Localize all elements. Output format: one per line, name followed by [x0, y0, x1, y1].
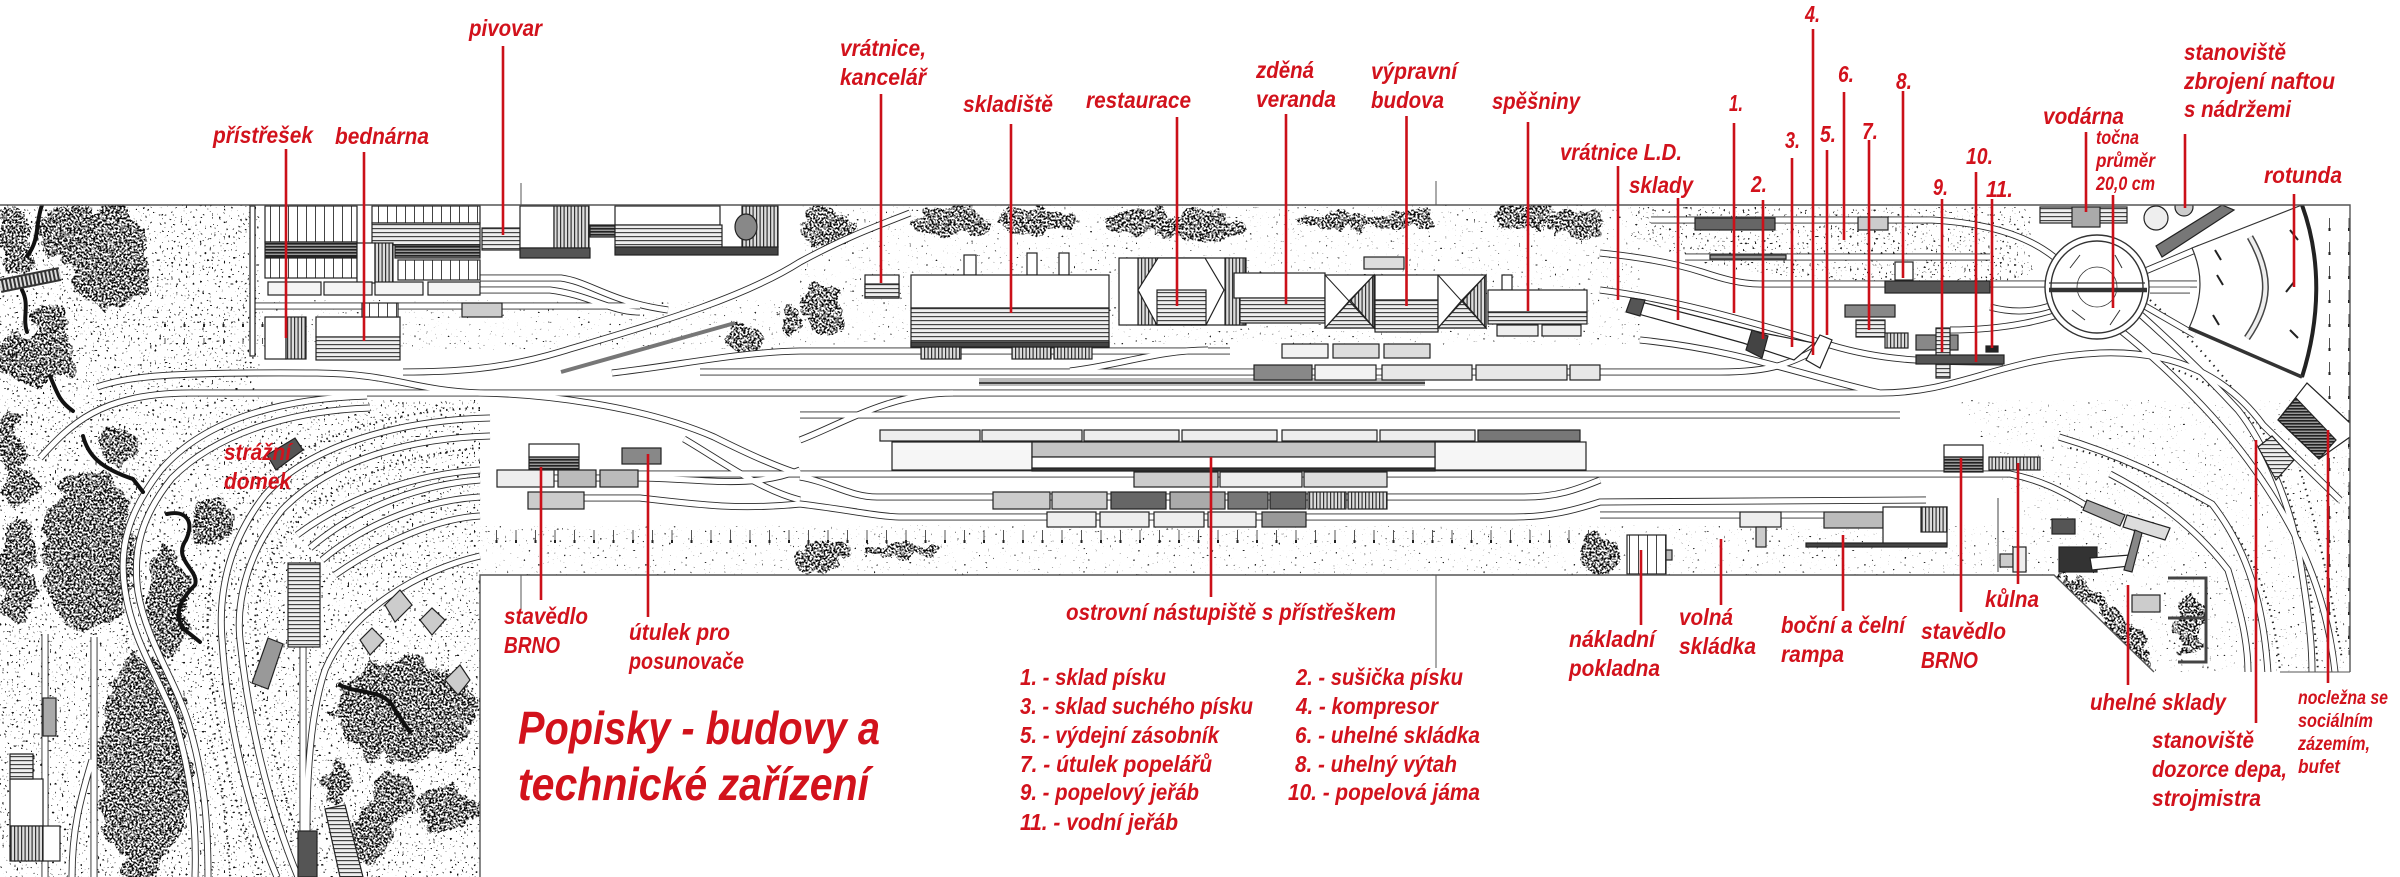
- title: [518, 702, 880, 810]
- label: volná skládka: volná: [1679, 604, 1733, 630]
- buildings: brewery complex: [250, 206, 778, 360]
- southern yard buildings: [1627, 445, 2206, 662]
- label: volná skládka: skládka: [1679, 633, 1756, 659]
- buildings: main station row: [865, 253, 1600, 380]
- label: ostrovní nástupiště s přístřeškem: ostrovní nástupiště s přístřeškem: [1066, 599, 1396, 625]
- label: nákladní pokladna: [1568, 550, 1660, 681]
- label: volná skládka: [1679, 539, 1756, 659]
- label: strážní domek: strážní: [224, 439, 293, 465]
- label: stavědlo BRNO west: BRNO: [504, 632, 560, 658]
- label: 5.: 5.: [1820, 121, 1836, 147]
- label: skladiště: skladiště: [963, 91, 1053, 117]
- label: vrátnice L.D.: vrátnice L.D.: [1560, 139, 1682, 165]
- legend: numbered list right column: 8. - uhelný výtah: [1295, 751, 1457, 777]
- label: nocležna se sociálním zázemím, bufet: sociálním: [2298, 711, 2373, 732]
- ballast dots along curved tracks: [111, 300, 2342, 877]
- label: nocležna se sociálním zázemím, bufet: zázemím,: [2297, 734, 2370, 755]
- label: útulek pro posunovače: [628, 454, 744, 674]
- tree ticks along embankment: [496, 530, 1590, 543]
- label: sklady: sklady: [1629, 172, 1694, 198]
- label: strážní domek: [224, 439, 293, 494]
- label: bednárna: bednárna: [335, 123, 429, 149]
- label: stanoviště dozorce depa, strojmistra: strojmistra: [2152, 785, 2261, 811]
- legend: numbered list left column: 3. - sklad suchého písku: [1020, 693, 1253, 719]
- label: 11.: 11.: [1986, 176, 2013, 202]
- legend: numbered list right column: 4. - kompresor: [1295, 693, 1439, 719]
- label: uhelné sklady: [2090, 585, 2227, 715]
- label: boční a čelní rampa: [1781, 535, 1907, 667]
- label: 4.: 4.: [1804, 1, 1820, 27]
- label: výpravní budova: výpravní: [1371, 58, 1459, 84]
- label: restaurace: restaurace: [1086, 87, 1191, 113]
- legend: numbered list left column: [1020, 664, 1253, 835]
- trees: [0, 199, 2205, 877]
- label: kůlna: kůlna: [1985, 586, 2039, 612]
- label: 2.: 2.: [1750, 171, 1767, 197]
- label: vrátnice, kancelář: kancelář: [840, 64, 929, 90]
- depot: water tower and diesel stand: [2040, 198, 2234, 257]
- label: zděná veranda: veranda: [1256, 86, 1336, 112]
- title: Popisky - budovy a: [518, 702, 880, 754]
- label: boční a čelní rampa: boční a čelní: [1781, 612, 1907, 638]
- map: station plan: [0, 198, 2350, 877]
- legend: numbered list left column: 11. - vodní jeřáb: [1020, 809, 1178, 835]
- legend: numbered list right column: 10. - popelová jáma: [1288, 779, 1480, 805]
- label: stanoviště zbrojení naftou s nádržemi: [2183, 39, 2335, 208]
- label: nocležna se sociálním zázemím, bufet: bufet: [2298, 757, 2341, 778]
- label: stavědlo BRNO east: [1921, 458, 2006, 673]
- label: 1.: 1.: [1729, 90, 1743, 116]
- label: rotunda: [2264, 162, 2342, 287]
- label: zděná veranda: zděná: [1255, 57, 1314, 83]
- legend: numbered list left column: 9. - popelový jeřáb: [1020, 779, 1199, 805]
- label: nákladní pokladna: pokladna: [1568, 655, 1660, 681]
- label: 7.: 7.: [1862, 118, 1878, 144]
- label: zděná veranda: [1255, 57, 1336, 304]
- tracks: [40, 213, 2340, 877]
- ground stipple west: [0, 205, 480, 877]
- label: stanoviště zbrojení naftou s nádržemi: stanoviště: [2184, 39, 2286, 65]
- depot: roundhouse: [2189, 205, 2316, 377]
- label: točna průměr 20,0 cm: točna: [2096, 128, 2139, 149]
- label: stanoviště dozorce depa, strojmistra: stanoviště: [2152, 727, 2254, 753]
- label: vodárna: [2043, 103, 2124, 212]
- label: útulek pro posunovače: posunovače: [628, 648, 744, 674]
- rivers: [22, 205, 410, 732]
- legend: numbered list left column: 1. - sklad písku: [1020, 664, 1166, 690]
- label: 8.: 8.: [1896, 68, 1912, 94]
- label: stanoviště zbrojení naftou s nádržemi: zbrojení naftou: [2183, 68, 2335, 94]
- label: nocležna se sociálním zázemím, bufet: [2297, 430, 2388, 778]
- label: uhelné sklady: uhelné sklady: [2090, 689, 2227, 715]
- label: 9.: 9.: [1933, 174, 1948, 200]
- label: vrátnice, kancelář: [840, 35, 929, 283]
- label: stanoviště zbrojení naftou s nádržemi: s nádržemi: [2184, 96, 2292, 122]
- label: rotunda: rotunda: [2264, 162, 2342, 188]
- depot: dispatcher and dormitory buildings: [2258, 383, 2350, 480]
- label: 6.: 6.: [1838, 61, 1854, 87]
- label: útulek pro posunovače: útulek pro: [629, 619, 730, 645]
- label: stavědlo BRNO west: stavědlo: [504, 603, 588, 629]
- label: 10.: 10.: [1966, 143, 1993, 169]
- legend: numbered list left column: 7. - útulek popelářů: [1020, 751, 1212, 777]
- depot: turntable: [2045, 235, 2149, 339]
- trackbed band: [561, 323, 735, 372]
- legend: numbered list right column: 6. - uhelné skládka: [1295, 722, 1480, 748]
- label: boční a čelní rampa: rampa: [1781, 641, 1844, 667]
- band of ballast east of the station: [1630, 207, 2033, 287]
- legend: numbered list right column: 2. - sušička písku: [1295, 664, 1463, 690]
- map frame: [0, 181, 2350, 877]
- label: točna průměr 20,0 cm: průměr: [2095, 151, 2156, 172]
- title: technické zařízení: [518, 758, 874, 810]
- label: výpravní budova: budova: [1371, 87, 1444, 113]
- legend: numbered list right column: [1288, 664, 1480, 805]
- island platform and trains: [497, 430, 1586, 527]
- lower-left buildings: [10, 438, 470, 877]
- label: točna průměr 20,0 cm: [2095, 128, 2156, 308]
- label: stavědlo BRNO east: BRNO: [1921, 647, 1978, 673]
- label: spěšniny: spěšniny: [1492, 88, 1581, 114]
- label: stanoviště dozorce depa, strojmistra: [2152, 440, 2287, 811]
- label: přístřešek: přístřešek: [212, 122, 314, 148]
- legend: numbered list left column: 5. - výdejní zásobník: [1020, 722, 1220, 748]
- label: točna průměr 20,0 cm: 20,0 cm: [2095, 174, 2155, 195]
- label: vodárna: vodárna: [2043, 103, 2124, 129]
- label: výpravní budova: [1371, 58, 1459, 306]
- label: stavědlo BRNO east: stavědlo: [1921, 618, 2006, 644]
- depot: sand stores: [1626, 217, 2004, 378]
- bridge: [0, 274, 60, 286]
- ground stipple faint: [260, 205, 2350, 672]
- label: strážní domek: domek: [224, 468, 292, 494]
- label: vrátnice, kancelář: vrátnice,: [840, 35, 926, 61]
- label: stanoviště dozorce depa, strojmistra: dozorce depa,: [2152, 756, 2287, 782]
- label: stavědlo BRNO west: [504, 467, 588, 658]
- label: 3.: 3.: [1785, 127, 1800, 153]
- label: pivovar: pivovar: [468, 15, 543, 41]
- label: nákladní pokladna: nákladní: [1569, 626, 1657, 652]
